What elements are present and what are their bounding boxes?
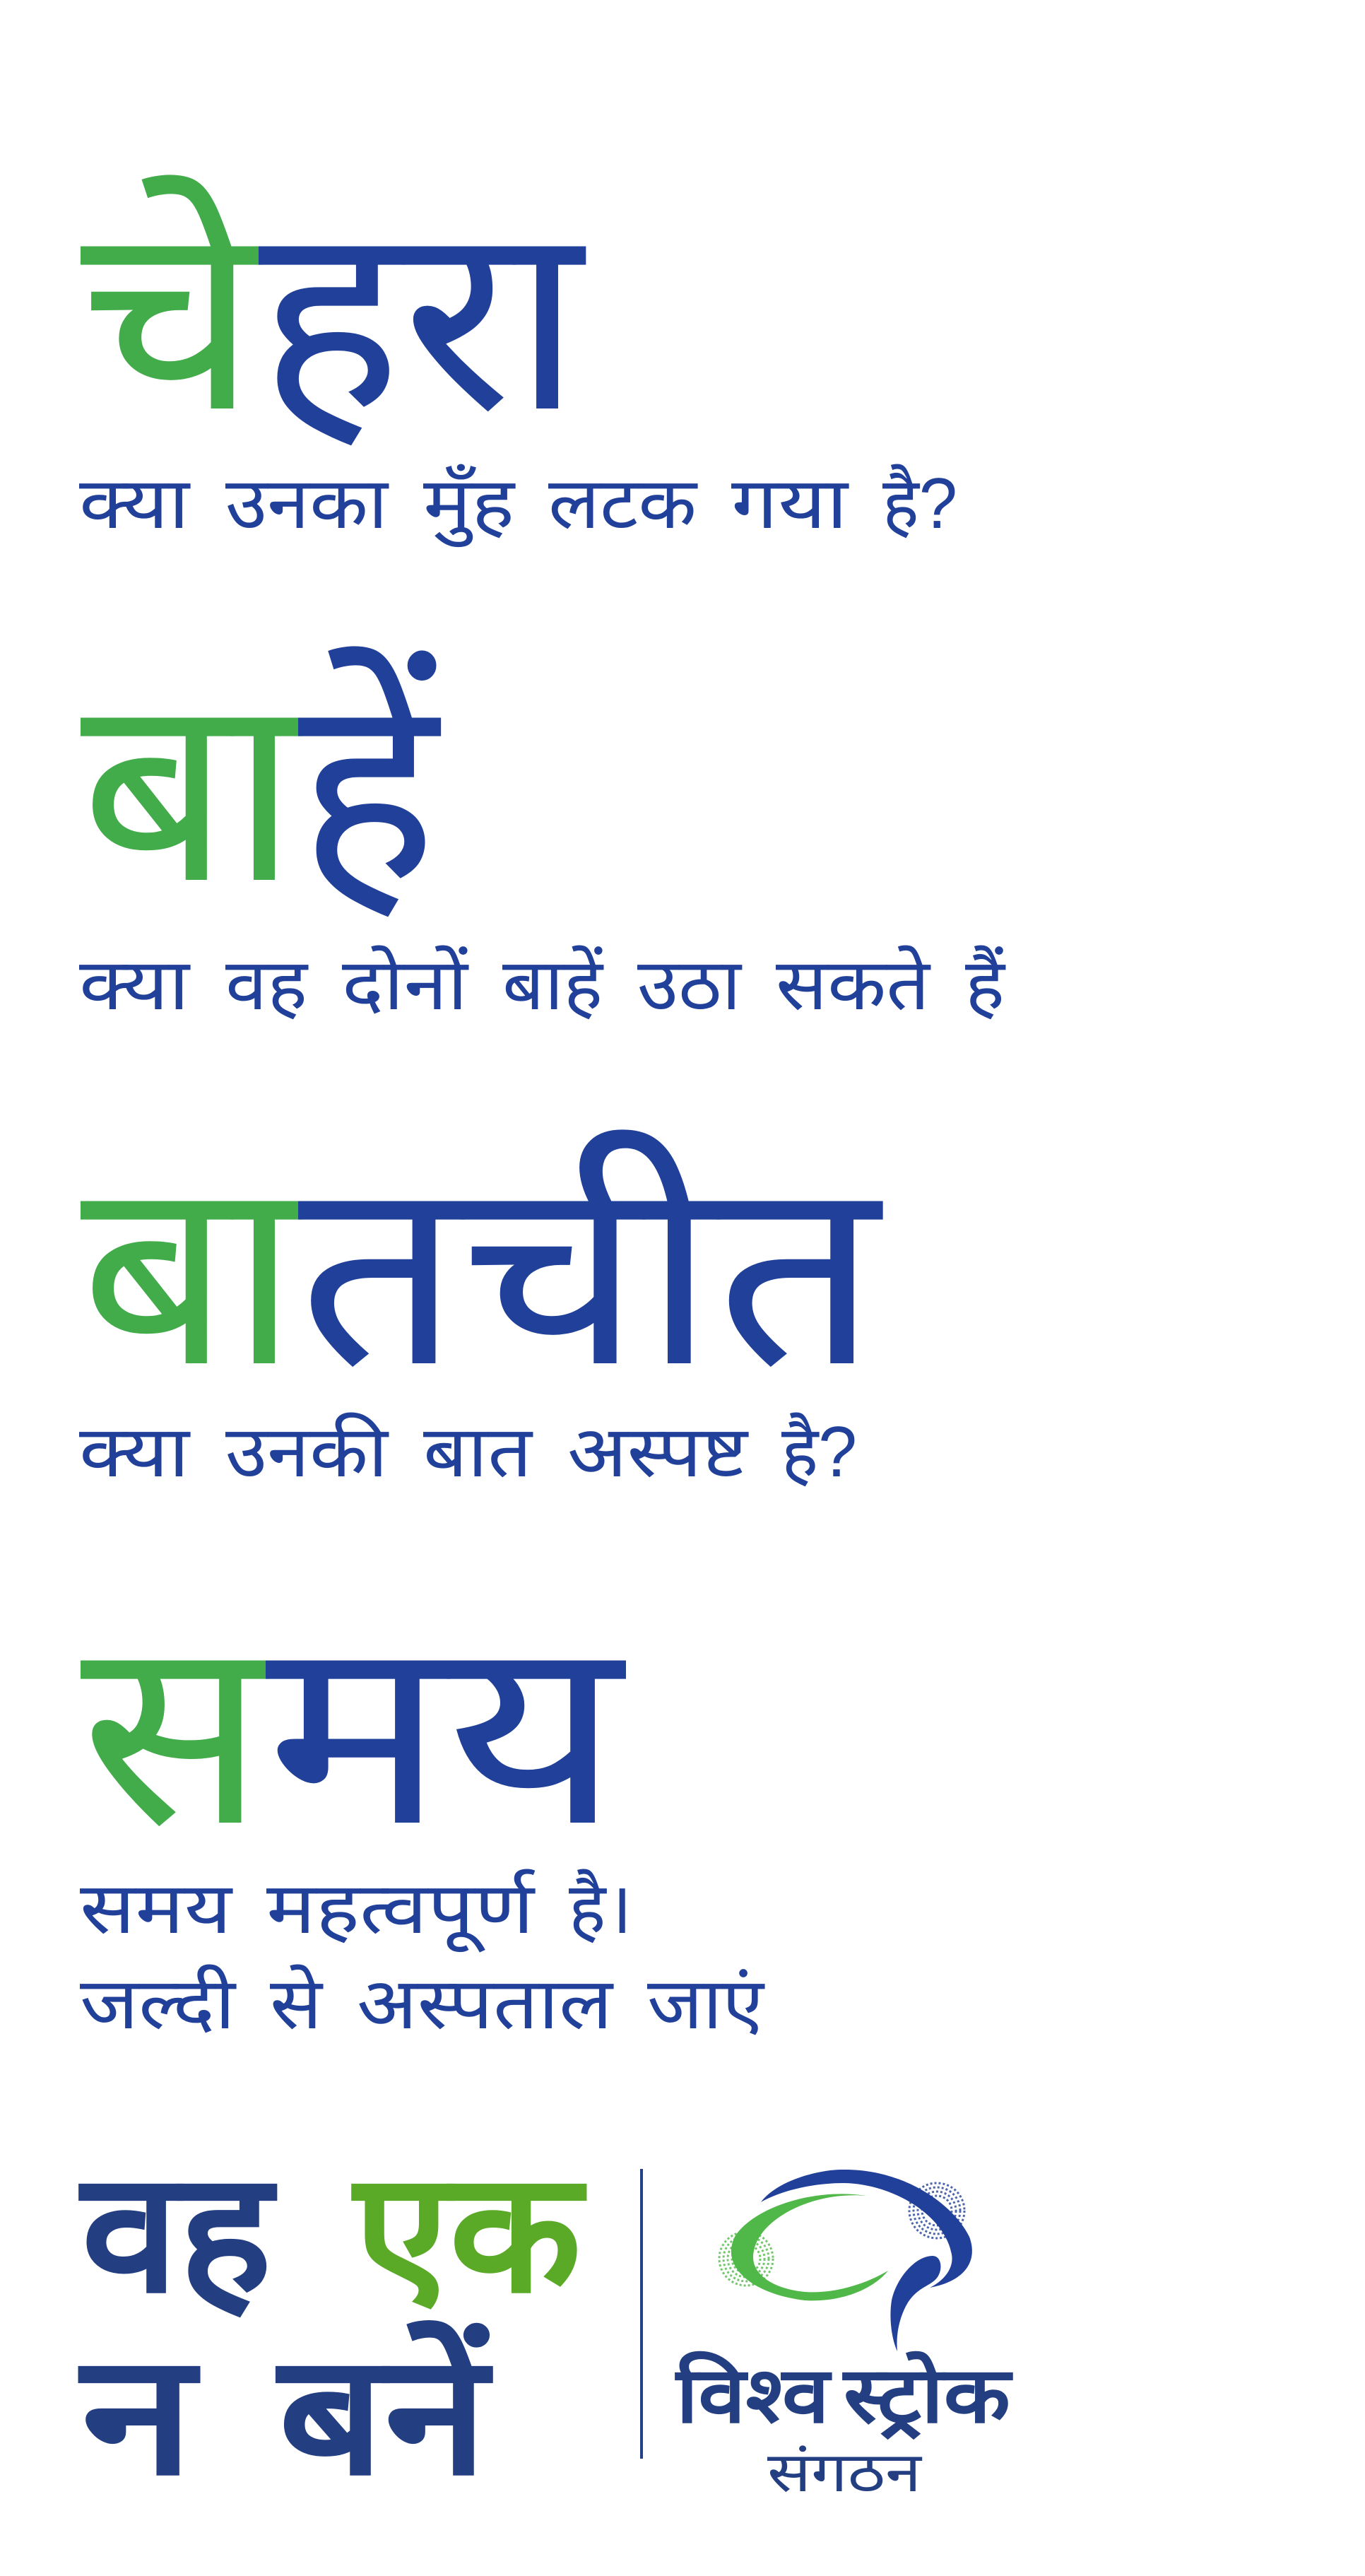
text block: time message: समय	[80, 1869, 233, 1948]
heading: speech: तचीत	[298, 1127, 886, 1419]
text block: time message	[80, 1869, 765, 2044]
text block: speech question: क्या	[79, 1413, 191, 1492]
slogan: वह	[78, 2139, 277, 2327]
text block: speech question: है?	[781, 1412, 857, 1492]
logo wordmark: विश्व	[675, 2351, 832, 2439]
text block: face question: क्या	[79, 464, 191, 543]
text block: speech question: बात	[423, 1413, 533, 1492]
heading: time	[81, 1587, 631, 1878]
heading: time: स	[81, 1587, 273, 1878]
text block: time message: जल्दी	[80, 1964, 237, 2044]
logo wordmark: स्ट्रोक	[842, 2351, 1013, 2440]
heading: arms: बा	[81, 645, 304, 936]
slogan	[78, 2139, 587, 2509]
divider	[640, 2169, 643, 2459]
logo subtitle: संगठन	[767, 2441, 923, 2503]
text block: time message: जाएं	[647, 1965, 765, 2044]
heading: arms	[81, 644, 442, 936]
icon: green crescent	[731, 2194, 888, 2300]
text block: arms question: सकते	[776, 945, 931, 1025]
text block: face question: लटक	[548, 464, 699, 543]
text block: time message: महत्वपूर्ण	[266, 1869, 536, 1953]
text block: time message: अस्पताल	[357, 1965, 614, 2044]
heading: arms: हें	[298, 644, 442, 936]
text block: arms question: बाहें	[502, 945, 604, 1025]
heading: face	[81, 172, 588, 464]
text block: arms question: हैं	[965, 945, 1006, 1025]
slogan: बनें	[276, 2319, 493, 2509]
text block: face question: मुँह	[423, 464, 516, 548]
text block: arms question	[79, 945, 1006, 1025]
icon: blue drop	[890, 2256, 940, 2351]
heading: face: चे	[81, 172, 264, 464]
text block: face question	[79, 464, 957, 548]
heading: time: मय	[266, 1587, 631, 1878]
icon: blue arc	[761, 2170, 972, 2288]
text block: time message: से	[270, 1964, 324, 2044]
text block: arms question: वह	[225, 946, 309, 1025]
icon: dotted bursts	[719, 2183, 964, 2286]
slogan: एक	[351, 2139, 587, 2327]
slogan: न	[78, 2322, 201, 2509]
text block: speech question: अस्पष्ट	[567, 1413, 749, 1492]
text block: arms question: उठा	[637, 946, 743, 1025]
heading: face: हरा	[259, 173, 588, 464]
text block: arms question: क्या	[79, 946, 191, 1025]
text block: arms question: दोनों	[342, 945, 469, 1025]
logo wordmark	[675, 2351, 1013, 2440]
heading: speech: बा	[81, 1128, 304, 1419]
text block: speech question	[79, 1412, 857, 1492]
text block: face question: गया	[731, 464, 849, 543]
text block: speech question: उनकी	[225, 1412, 389, 1492]
text block: face question: उनका	[225, 464, 389, 543]
text block: time message: है।	[569, 1869, 632, 1948]
logo: World Stroke Organization	[675, 2170, 1013, 2503]
text block: face question: है?	[882, 464, 957, 543]
heading: speech	[81, 1127, 886, 1419]
